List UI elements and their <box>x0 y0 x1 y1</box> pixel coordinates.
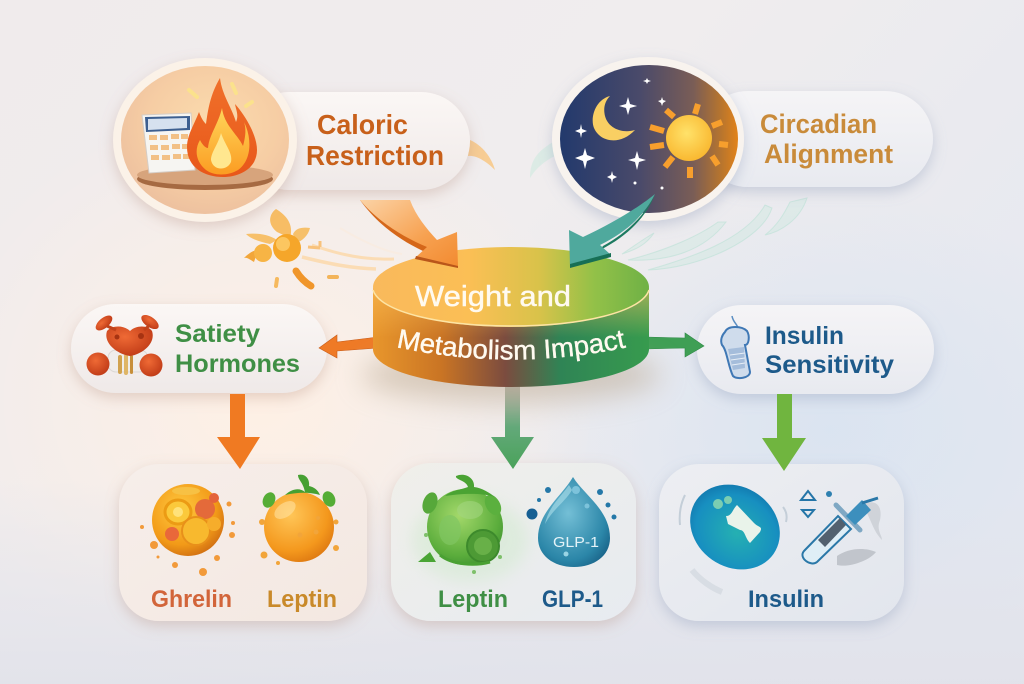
icon: insulin blob <box>674 467 796 592</box>
label pill: satiety hormones <box>71 304 327 393</box>
arrow: center to satiety hormones <box>319 335 378 358</box>
icon: syringe <box>801 491 882 566</box>
heading line: weight and: Weight and <box>415 281 571 313</box>
heading: circadian alignment: Circadian <box>760 109 877 139</box>
arrow: caloric restriction to center <box>360 200 458 268</box>
arrow: circadian alignment to center <box>569 194 655 268</box>
icon: calculator and flame <box>113 58 297 222</box>
heading: satiety hormones: Hormones <box>175 350 300 378</box>
heading: caloric restriction: Restriction <box>306 140 444 171</box>
arrow: center disc to leptin panel <box>491 384 534 469</box>
label pill: insulin sensitivity <box>697 305 934 394</box>
icon: GLP-1 drop <box>526 477 616 567</box>
caloric restriction node <box>113 58 470 222</box>
heading: satiety hormones: Satiety <box>175 320 260 348</box>
heading: insulin sensitivity: Insulin <box>765 322 844 350</box>
label pill: caloric restriction <box>240 92 470 190</box>
center disc: weight and metabolism impact <box>357 247 666 416</box>
decorative splash: orange fruit and streaks <box>244 209 402 286</box>
heading: circadian alignment: Alignment <box>764 139 893 169</box>
panel: leptin and GLP-1 <box>391 463 636 621</box>
label: ghrelin: Ghrelin <box>151 586 232 613</box>
icon: ghrelin cell <box>140 484 235 576</box>
arrow: satiety hormones to ghrelin panel <box>217 394 260 469</box>
satiety hormones node <box>71 304 327 393</box>
label: leptin green: Leptin <box>438 586 508 613</box>
label pill: circadian alignment <box>700 91 933 187</box>
icon: hormone molecule <box>86 312 162 376</box>
insulin sensitivity node <box>697 305 934 394</box>
heading: caloric restriction: Caloric <box>317 109 408 140</box>
panel: insulin <box>659 464 904 621</box>
icon: GLP-1 drop: GLP-1 <box>553 534 599 551</box>
icon: insulin device <box>721 316 750 378</box>
label: GLP-1: GLP-1 <box>542 586 603 613</box>
icon: moon, stars and sun <box>552 57 744 221</box>
label: leptin orange: Leptin <box>267 586 337 613</box>
icon: leptin orange <box>259 475 339 565</box>
circadian alignment node <box>552 57 933 221</box>
panel: ghrelin and leptin <box>119 464 367 621</box>
heading: insulin sensitivity: Sensitivity <box>765 351 894 379</box>
decorative swooshes: teal wings <box>468 140 807 270</box>
icon: leptin green cell <box>418 475 505 574</box>
heading line: metabolism impact: Metabolism Impact <box>398 329 626 362</box>
label: insulin: Insulin <box>748 586 824 613</box>
arrow: insulin sensitivity to insulin panel <box>762 394 806 471</box>
arrow: center to insulin sensitivity <box>645 333 704 357</box>
